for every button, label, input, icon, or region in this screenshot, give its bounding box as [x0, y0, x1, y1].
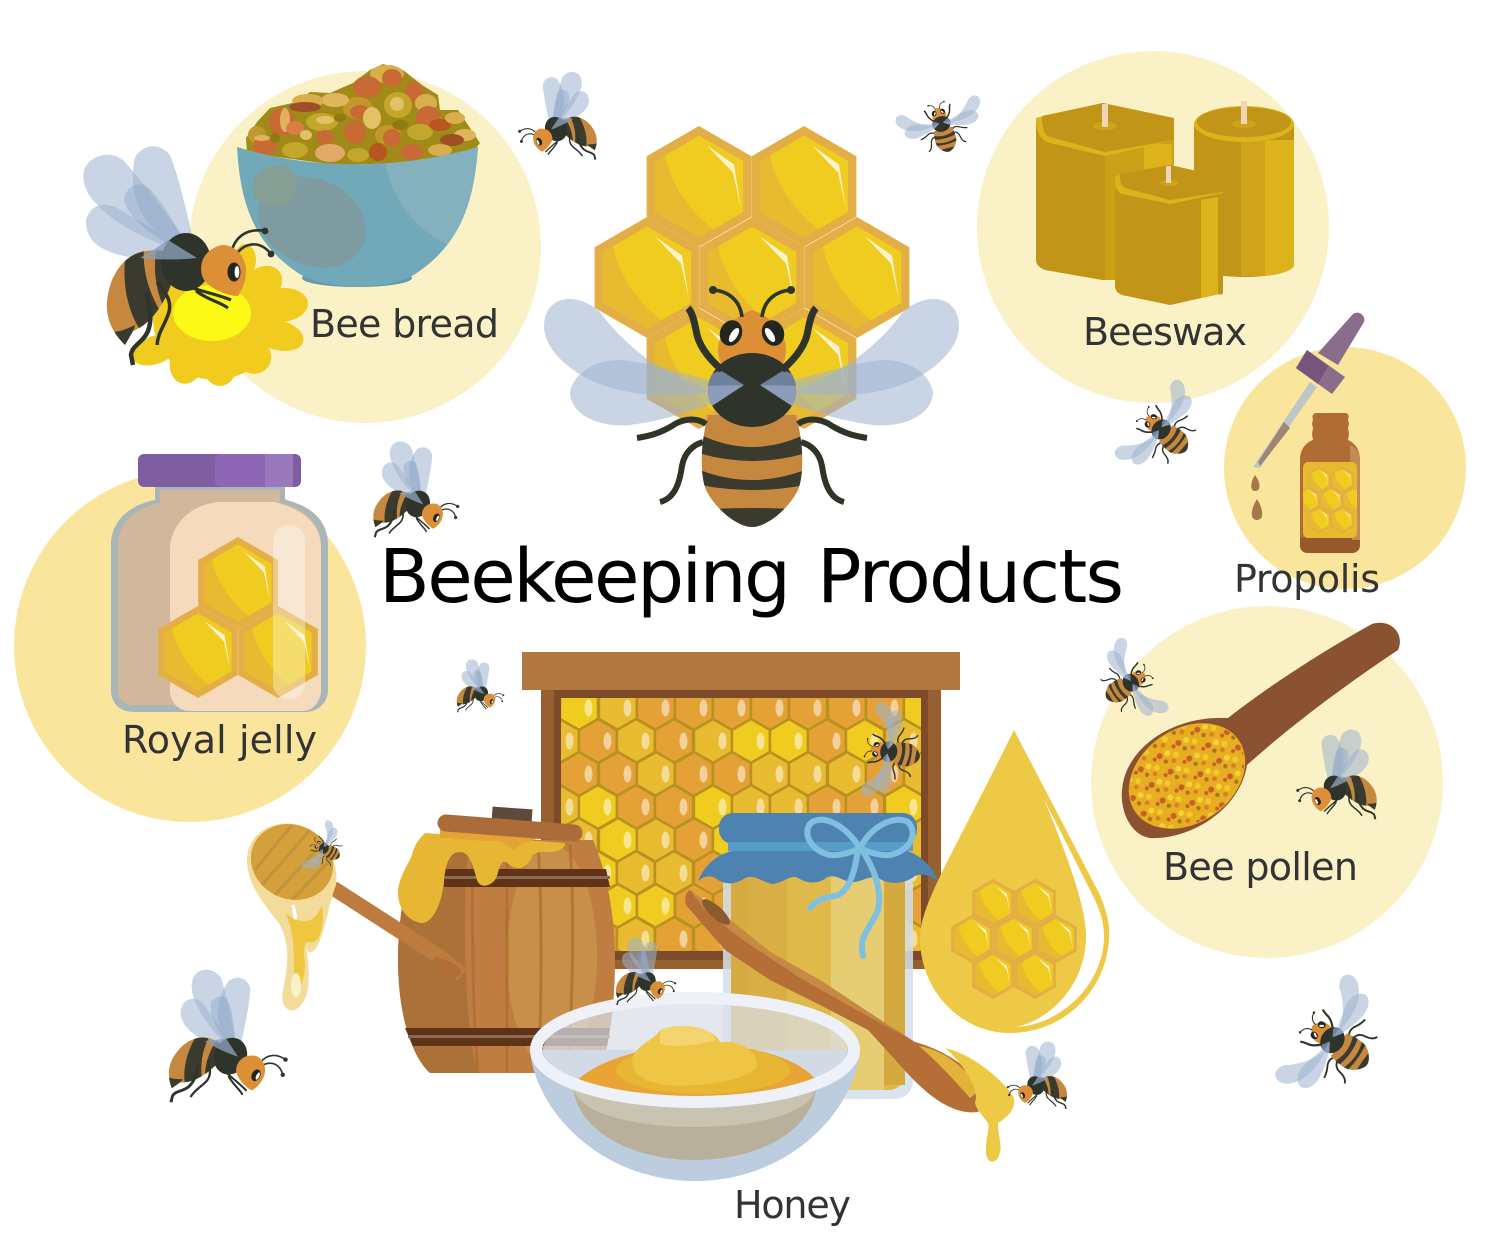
hexagonal candle [1036, 103, 1174, 280]
icon: top-view bee near beeswax top [894, 92, 991, 164]
icon: top-view bee on dipper [299, 818, 353, 881]
icon: bee bottom left [142, 960, 314, 1141]
jar glass [111, 487, 328, 712]
panel: bee bread circle [189, 71, 541, 423]
icon: small bee near royal jelly [354, 434, 479, 565]
bowl interior [543, 1002, 847, 1160]
icon: small bee top left [501, 65, 615, 185]
illustration: bee pollen spoon [1108, 623, 1400, 851]
icon: top-view bee bottom right [1269, 969, 1405, 1118]
label: bee pollen: Bee pollen [1163, 845, 1358, 889]
flower centre [173, 285, 251, 341]
bread pile [246, 64, 480, 165]
icon: large central bee [544, 286, 959, 530]
label: royal jelly: Royal jelly [122, 718, 317, 762]
icon: top-view bee left of pollen [1082, 634, 1173, 735]
panel: bee pollen circle [1091, 606, 1443, 958]
icon: top-view bee below beeswax [1110, 375, 1219, 489]
jar lid [138, 454, 301, 487]
honey in bowl [575, 1026, 816, 1102]
drops [1251, 475, 1262, 520]
panel: royal jelly circle [14, 470, 366, 822]
cylinder candle [1194, 101, 1294, 277]
barrel bands [405, 869, 610, 1046]
title: Products [817, 534, 1124, 620]
illustration: central honeycomb [595, 126, 909, 429]
dropper [1253, 313, 1364, 468]
frame top bar [522, 652, 960, 690]
illustration: beeswax candles [1036, 101, 1294, 305]
bottle [1300, 413, 1360, 553]
bowl rim [536, 998, 854, 1102]
honey drip on spoon [919, 1046, 1014, 1162]
title: Beekeeping [379, 534, 791, 620]
frame comb cells [561, 698, 921, 951]
label: propolis: Propolis [1234, 557, 1380, 601]
label: bee bread: Bee bread [310, 302, 499, 346]
illustration: honey drop [920, 730, 1109, 1033]
honeycomb in jar [158, 537, 318, 698]
jar glass and honey [723, 870, 913, 1099]
illustration: honey barrel [398, 807, 615, 1073]
cloth [698, 813, 938, 884]
illustration: wooden spoon [685, 890, 1014, 1162]
illustration: flower [128, 244, 309, 388]
honey on barrel [398, 833, 565, 923]
barrel lid [446, 807, 574, 833]
illustration: honey jar with blue cloth [698, 813, 938, 1099]
pollen [1108, 701, 1266, 851]
blue bowl [237, 140, 490, 287]
panel: propolis circle [1224, 347, 1466, 589]
illustration: royal jelly jar [111, 454, 328, 712]
small hexagonal candle [1115, 165, 1223, 305]
illustration: propolis bottle and dropper [1251, 313, 1366, 553]
dipper grooves [255, 825, 335, 900]
icon: bee above bowl [602, 933, 690, 1025]
label: beeswax: Beeswax [1083, 310, 1247, 354]
illustration: glass bowl of honey [530, 998, 860, 1181]
label: honey: Honey [734, 1183, 851, 1227]
icon: tiny bee above frame [446, 655, 515, 728]
icon: bee on pollen circle [1278, 723, 1395, 846]
barrel body [398, 840, 615, 1073]
ribbon bow [807, 820, 913, 956]
illustration: honeycomb frame [522, 652, 960, 969]
icon: top-view bee on frame [857, 701, 929, 804]
illustration: honey dipper [238, 811, 462, 1010]
barrel staves [440, 845, 573, 1073]
illustration: bee bread bowl [237, 64, 490, 287]
icon: large bee on flower [83, 146, 274, 365]
panel: beeswax circle [977, 51, 1329, 403]
icon: bee beside spoon [993, 1037, 1081, 1129]
